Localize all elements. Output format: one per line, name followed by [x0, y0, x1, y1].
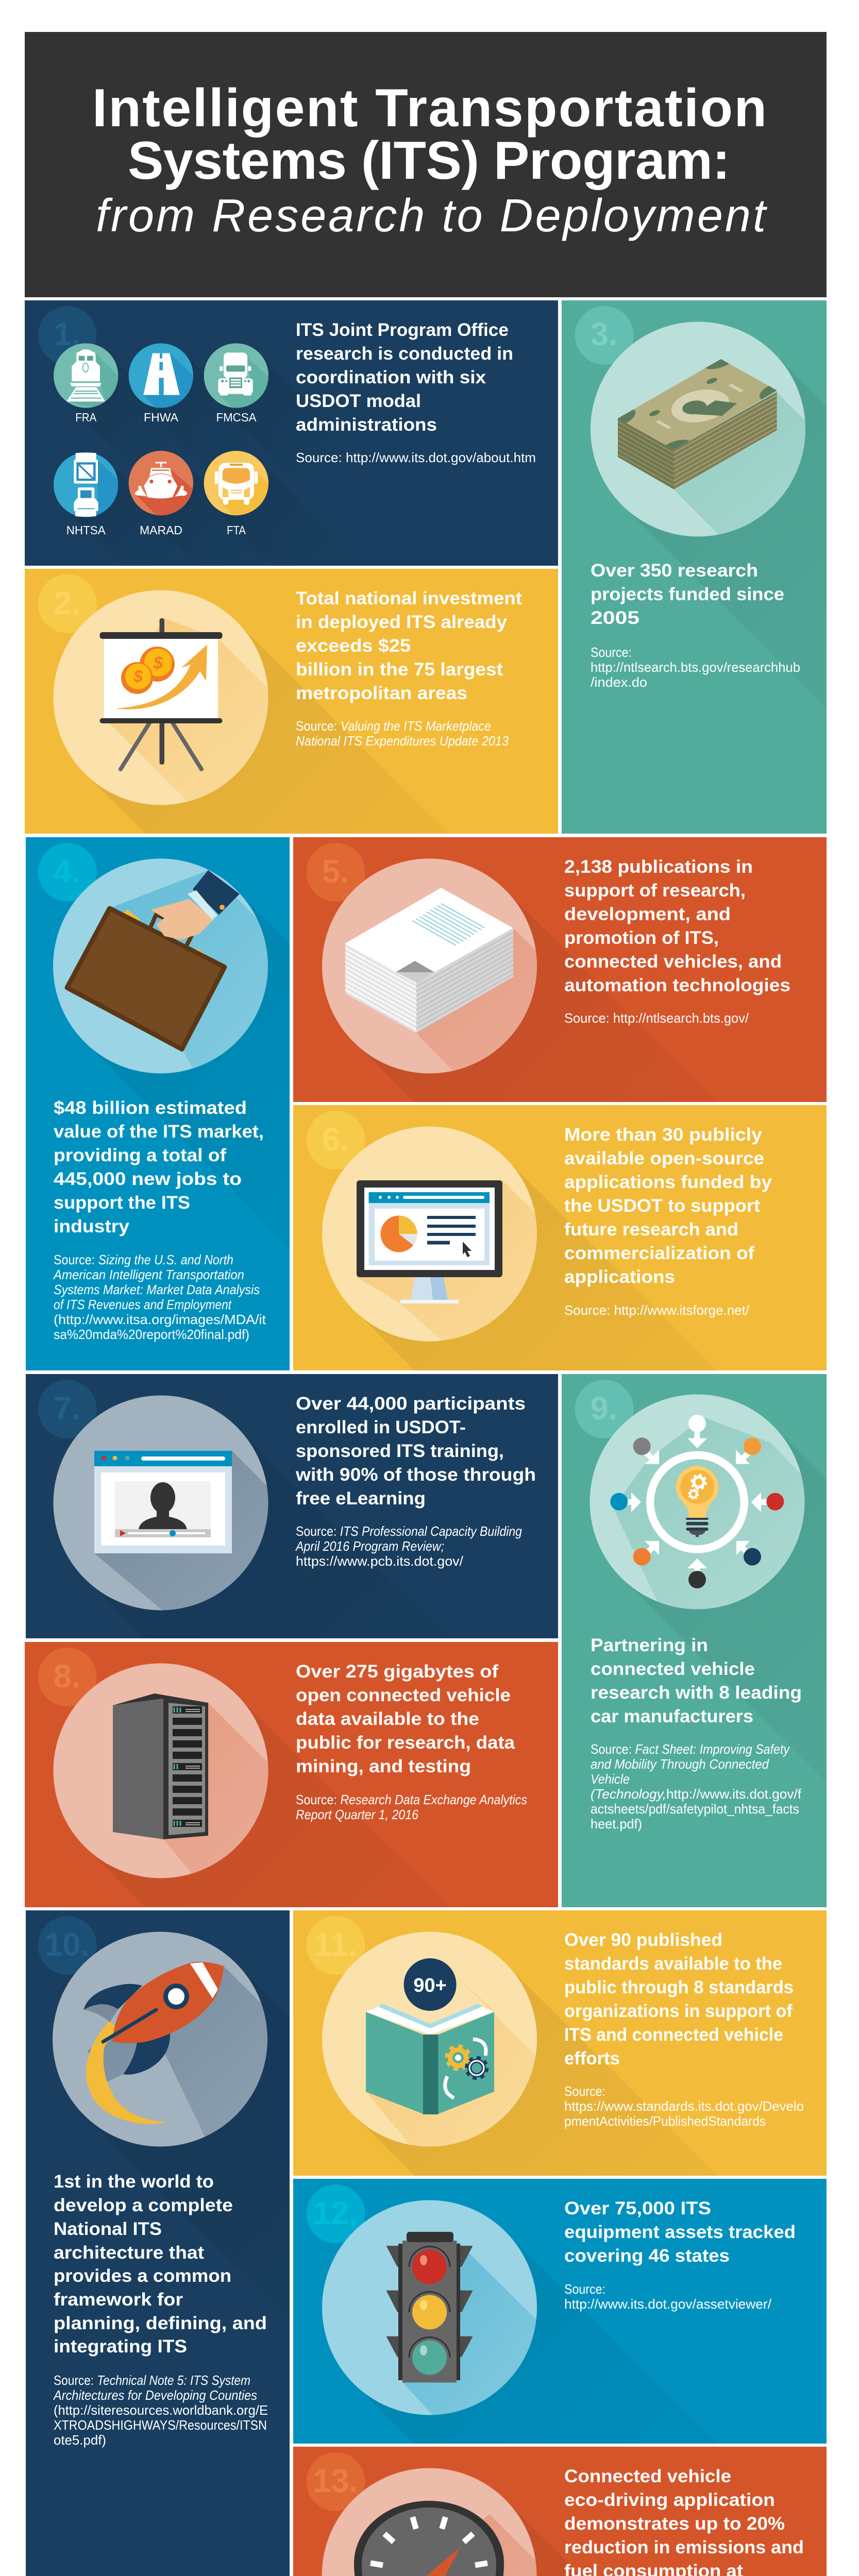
panel 12: equipment assets [293, 2179, 827, 2444]
source: Architectures for Developing Counties [53, 2387, 257, 2403]
heading: commercialization of [564, 1243, 754, 1263]
source: Source: Sizing the U.S. and North [54, 1252, 233, 1267]
heading: Over 44,000 participants [296, 1394, 526, 1414]
source [296, 1792, 527, 1822]
source: Source: Fact Sheet: Improving Safety [591, 1741, 790, 1757]
icon: rocket [53, 1932, 381, 2246]
source: https://www.pcb.its.dot.gov/ [296, 1553, 464, 1569]
number badge 10 [38, 1916, 97, 1975]
heading [564, 2198, 796, 2266]
source: http://www.its.dot.gov/assetviewer/ [564, 2296, 772, 2312]
modal labels: MARAD [140, 523, 182, 537]
source [564, 2281, 772, 2312]
heading: planning, defining, and [54, 2313, 267, 2333]
heading: public for research, data [296, 1733, 515, 1753]
source: National ITS Expenditures Update 2013 [296, 733, 509, 749]
number badge 11: 11. [314, 1927, 357, 1963]
source: Source: [564, 2083, 605, 2099]
panel 1: ITS JPO modal administrations [25, 300, 558, 566]
icon: easel with growth chart [54, 590, 268, 805]
source [591, 1741, 802, 1832]
source: Source: ITS Professional Capacity Building [296, 1523, 522, 1539]
heading: with 90% of those through [295, 1465, 536, 1485]
number badge 9 [575, 1380, 634, 1438]
icon group: six modal administrations [54, 343, 351, 600]
icon: hand holding briefcase [53, 858, 268, 1074]
heading: car manufacturers [591, 1706, 753, 1726]
heading: demonstrates up to 20% [564, 2514, 785, 2534]
heading: Over 275 gigabytes of [296, 1662, 498, 1682]
source [53, 1252, 266, 1342]
source: Source: Valuing the ITS Marketplace [296, 718, 491, 734]
heading: research is conducted in [296, 344, 513, 364]
heading [591, 1635, 802, 1726]
source: /index.do [591, 674, 647, 690]
heading: organizations in support of [564, 2001, 793, 2021]
heading: free eLearning [296, 1488, 426, 1509]
heading: USDOT modal [296, 391, 421, 411]
title panel: Systems (ITS) Program: [128, 131, 730, 191]
source: Source: http://www.itsforge.net/ [564, 1302, 750, 1318]
heading: billion in the 75 largest [296, 659, 503, 680]
panel 8: open data [25, 1642, 558, 1907]
icon: open book with 90+ badge [322, 1932, 608, 2246]
source: and Mobility Through Connected [591, 1756, 769, 1772]
source [591, 645, 800, 690]
heading: mining, and testing [296, 1756, 471, 1776]
heading: support the ITS [54, 1193, 190, 1213]
heading [295, 1394, 536, 1509]
panel 13: eco-driving application [293, 2447, 827, 2576]
heading: framework for [54, 2290, 183, 2310]
icon: FMCSA truck [204, 343, 268, 408]
source: Source: [564, 2281, 605, 2297]
heading: administrations [296, 415, 437, 435]
heading: development, and [564, 904, 731, 924]
heading: 1st in the world to [54, 2172, 214, 2192]
heading: connected vehicles, and [564, 952, 782, 972]
source: (http://www.itsa.org/images/MDA/it [54, 1312, 266, 1327]
heading: provides a common [54, 2266, 231, 2286]
title panel: from Research to Deployment [96, 190, 768, 242]
icon: fuel gauge with leaf [322, 2468, 649, 2576]
heading: value of the ITS market, [54, 1122, 264, 1142]
number badge 2 [38, 574, 97, 633]
number badge 7 [38, 1380, 97, 1438]
source: heet.pdf) [591, 1816, 642, 1832]
number badge 12: 12. [313, 2195, 358, 2231]
source: Source: [591, 645, 632, 660]
heading: Over 90 published [564, 1930, 722, 1950]
heading: Total national investment [296, 588, 522, 608]
heading: open connected vehicle [296, 1685, 511, 1705]
source: April 2016 Program Review; [295, 1538, 444, 1554]
source: sa%20mda%20report%20final.pdf) [54, 1327, 249, 1342]
heading [54, 2172, 267, 2357]
heading: More than 30 publicly [564, 1125, 763, 1145]
number badge 6: 6. [322, 1122, 349, 1158]
heading: available open-source [564, 1148, 764, 1168]
heading: standards available to the [564, 1954, 782, 1974]
heading: Over 75,000 ITS [564, 2198, 711, 2218]
heading: $48 billion estimated [54, 1098, 247, 1118]
modal labels: FMCSA [216, 411, 257, 424]
heading: Over 350 research [591, 561, 758, 581]
source: XTROADSHIGHWAYS/Resources/ITSN [54, 2417, 267, 2433]
modal labels: FRA [75, 411, 97, 424]
title panel: Intelligent Transportation [92, 78, 767, 138]
heading: support of research, [564, 880, 746, 901]
source [295, 1523, 522, 1569]
icon: NHTSA vehicle [54, 452, 118, 517]
heading: public through 8 standards [564, 1977, 794, 1997]
icon: light bulb with converging arrows [589, 1394, 805, 1609]
number badge 8 [38, 1648, 97, 1706]
heading: integrating ITS [54, 2336, 187, 2357]
heading: in deployed ITS already [296, 612, 508, 632]
source: ote5.pdf) [54, 2432, 106, 2448]
panel 3: research projects funded [562, 300, 827, 834]
number badge 13: 13. [313, 2463, 358, 2499]
heading: efforts [564, 2048, 620, 2069]
panel 2: national investment [25, 569, 558, 834]
icon: FRA train [54, 343, 118, 408]
source: actsheets/pdf/safetypilot_nhtsa_facts [591, 1801, 799, 1817]
icon: elearning video window [54, 1395, 268, 1611]
modal labels: FHWA [144, 411, 179, 424]
source: American Intelligent Transportation [53, 1267, 244, 1282]
heading: research with 8 leading [591, 1683, 802, 1703]
heading: 2,138 publications in [564, 857, 753, 877]
heading: enrolled in USDOT- [296, 1417, 466, 1437]
panel 9: car manufacturer partnerships [562, 1374, 827, 1907]
icon: easel with growth chart: $ [133, 667, 143, 686]
icon: FHWA road [129, 343, 193, 408]
icon: server rack [54, 1663, 268, 1878]
modal labels: NHTSA [66, 523, 106, 537]
source [564, 2083, 804, 2129]
heading: automation technologies [564, 975, 790, 995]
heading: eco-driving application [564, 2490, 775, 2510]
heading [296, 588, 522, 703]
source: http://ntlsearch.bts.gov/researchhub [591, 659, 800, 675]
icon: open book with 90+ badge: 90+ [413, 1975, 447, 1996]
panel 6: open-source applications [293, 1105, 827, 1370]
heading: projects funded since [591, 584, 784, 604]
heading: future research and [564, 1219, 738, 1240]
heading: data available to the [296, 1709, 479, 1729]
number badge 4 [38, 843, 97, 902]
heading [564, 1125, 772, 1287]
number badge 6 [306, 1111, 365, 1170]
number badge 7: 7. [54, 1391, 80, 1427]
source: (Technology,http://www.its.dot.gov/f [591, 1786, 802, 1802]
heading: ITS Joint Program Office [296, 320, 509, 340]
icon: stack of paper [322, 858, 537, 1074]
source: Source: http://www.its.dot.gov/about.htm [296, 450, 536, 465]
heading: covering 46 states [564, 2246, 730, 2266]
panel 5: publications [293, 837, 827, 1102]
icon: easel with growth chart: $ [153, 653, 164, 673]
number badge 1: 1. [54, 316, 80, 352]
heading: promotion of ITS, [564, 928, 719, 948]
heading: applications [564, 1267, 675, 1287]
panel 7: eLearning training [26, 1374, 558, 1638]
heading: connected vehicle [591, 1659, 755, 1679]
heading: develop a complete [54, 2195, 233, 2215]
modal labels: FTA [227, 523, 246, 537]
heading [296, 1662, 515, 1776]
source: Systems Market: Market Data Analysis [54, 1282, 260, 1297]
heading: applications funded by [564, 1172, 772, 1192]
heading: 2005 [591, 608, 639, 628]
heading: equipment assets tracked [564, 2222, 796, 2242]
heading [54, 1098, 264, 1236]
heading [564, 2466, 804, 2576]
source: pmentActivities/PublishedStandards [564, 2113, 766, 2129]
source: of ITS Revenues and Employment [54, 1297, 232, 1312]
heading: metropolitan areas [296, 683, 467, 703]
number badge 3: 3. [591, 316, 617, 352]
source: https://www.standards.its.dot.gov/Develo [564, 2098, 804, 2114]
source: Source: Research Data Exchange Analytics [296, 1792, 527, 1807]
heading: exceeds $25 [296, 636, 411, 656]
number badge 5: 5. [322, 854, 349, 890]
heading: coordination with six [296, 367, 486, 387]
number badge 1 [38, 306, 97, 365]
heading: reduction in emissions and [564, 2537, 804, 2557]
source: Report Quarter 1, 2016 [296, 1807, 418, 1822]
heading: National ITS [54, 2219, 162, 2239]
heading: sponsored ITS training, [296, 1441, 504, 1461]
heading [564, 1930, 794, 2069]
heading: industry [54, 1216, 130, 1236]
number badge 11 [306, 1916, 365, 1975]
source [53, 2372, 268, 2448]
heading [296, 320, 513, 435]
number badge 5 [306, 843, 365, 902]
title panel [25, 32, 827, 297]
icon: stack of money [591, 321, 805, 537]
source: (http://siteresources.worldbank.org/E [54, 2402, 268, 2418]
panel 4: ITS market value [26, 837, 290, 1370]
heading: the USDOT to support [564, 1196, 760, 1216]
source: Source: http://ntlsearch.bts.gov/ [564, 1010, 749, 1026]
number badge 13 [306, 2452, 365, 2511]
heading: Partnering in [591, 1635, 708, 1655]
number badge 9: 9. [591, 1391, 617, 1427]
icon: FTA bus [204, 451, 268, 515]
heading: ITS and connected vehicle [564, 2025, 783, 2045]
heading [564, 857, 790, 995]
number badge 4: 4. [54, 854, 80, 890]
number badge 3 [575, 306, 634, 365]
heading: 445,000 new jobs to [54, 1169, 242, 1189]
source: Source: Technical Note 5: ITS System [54, 2372, 250, 2388]
icon: traffic light [322, 2200, 618, 2504]
number badge 8: 8. [54, 1658, 80, 1694]
heading: Connected vehicle [564, 2466, 731, 2486]
heading [591, 561, 784, 628]
icon: computer monitor with pie chart [322, 1126, 537, 1342]
source [296, 718, 509, 749]
number badge 12 [306, 2184, 365, 2243]
panel 11: published standards [293, 1910, 827, 2176]
panel 10: national ITS architecture [26, 1910, 290, 2576]
source: Vehicle [591, 1771, 630, 1787]
number badge 2: 2. [54, 585, 80, 621]
heading: providing a total of [54, 1145, 226, 1165]
number badge 10: 10. [44, 1927, 90, 1963]
modal labels [66, 411, 257, 537]
icon: MARAD ship [129, 451, 193, 516]
heading: architecture that [54, 2243, 204, 2263]
